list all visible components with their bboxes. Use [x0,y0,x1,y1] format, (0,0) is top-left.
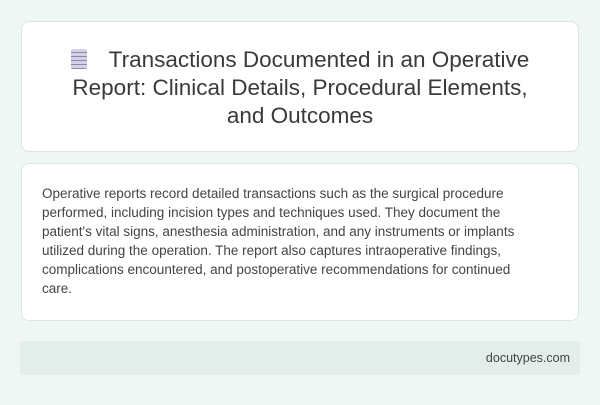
panel: description [21,163,579,321]
text block: Operative reports record detailed transactions such as the surgical procedure performed, including incision types and techniques used. They document the patient's vital signs, anesthesia administration, and any instruments or implants utilized during the operation. The report also captures intraoperative findings, complications encountered, and postoperative recommendations for continued care. [42,186,514,296]
panel: title [21,21,579,152]
title: Transactions Documented in an Operative Report: Clinical Details, Procedural Elements, and Outcomes [72,47,529,128]
footer [20,341,580,375]
icon: document [71,49,87,69]
footer: docutypes.com [486,351,570,365]
